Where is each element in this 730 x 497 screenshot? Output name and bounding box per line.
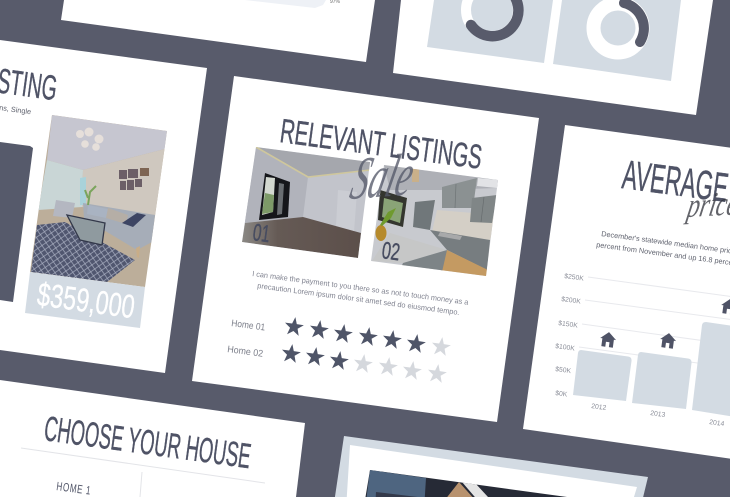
- living room photo: [30, 115, 167, 287]
- panel: top-right card with donut charts: [393, 0, 713, 115]
- bar chart: $200K: [561, 296, 582, 306]
- dark block: [0, 142, 33, 302]
- year labels: 2013: [650, 410, 666, 419]
- panel: bottom photo card: [333, 436, 648, 497]
- rating row: Home 02: [227, 343, 448, 383]
- donut tile 1: [427, 0, 553, 63]
- pale chart bar: [245, 0, 326, 8]
- house photo: [366, 470, 567, 497]
- rating row: Home 01: [231, 316, 452, 356]
- divider: [21, 448, 265, 483]
- rating row: Home 01: Home 01: [231, 318, 266, 333]
- bar chart: $0K: [555, 390, 568, 399]
- year labels: 2014: [709, 419, 725, 428]
- number 01: 01: [251, 219, 272, 248]
- bar chart: $250K: [564, 273, 585, 283]
- bar chart: [555, 273, 730, 428]
- plant: [85, 186, 96, 205]
- price band: [25, 272, 145, 328]
- number 02: 02: [380, 237, 402, 266]
- table: [67, 215, 105, 245]
- heading: RELEVANT LISTINGS: [278, 112, 484, 177]
- bar chart: $150K: [558, 320, 579, 330]
- price band: $359,000: [35, 275, 137, 325]
- bar chart: $50K: [555, 366, 572, 375]
- panel: choose your house: [0, 380, 305, 497]
- photo: empty living room: [242, 147, 370, 258]
- wall frames: [119, 168, 149, 190]
- script word: Sale: Sale: [345, 141, 421, 213]
- photo: kitchen: [371, 165, 498, 276]
- sofa: [83, 203, 155, 250]
- panel: top-left card: [61, 0, 375, 62]
- panel: average price: [523, 125, 730, 460]
- armchair: [53, 200, 75, 218]
- house icons: [599, 298, 730, 349]
- rating row: Home 02: Home 02: [227, 344, 264, 360]
- rug: [31, 222, 135, 282]
- chandelier: [76, 128, 104, 151]
- bars: [573, 322, 730, 417]
- body text: I can make the payment to you there so as not to touch money as a: [252, 269, 470, 307]
- panel: house listing: [0, 40, 207, 373]
- body text: precaution Lorem ipsum dolor sit amet sed do eiusmod tempo.: [257, 281, 460, 317]
- donut tile 2: [553, 0, 681, 81]
- bar chart: $100K: [555, 343, 576, 353]
- panel: relevant listings: [192, 76, 539, 422]
- year labels: 2012: [591, 403, 607, 412]
- year labels: [591, 403, 725, 428]
